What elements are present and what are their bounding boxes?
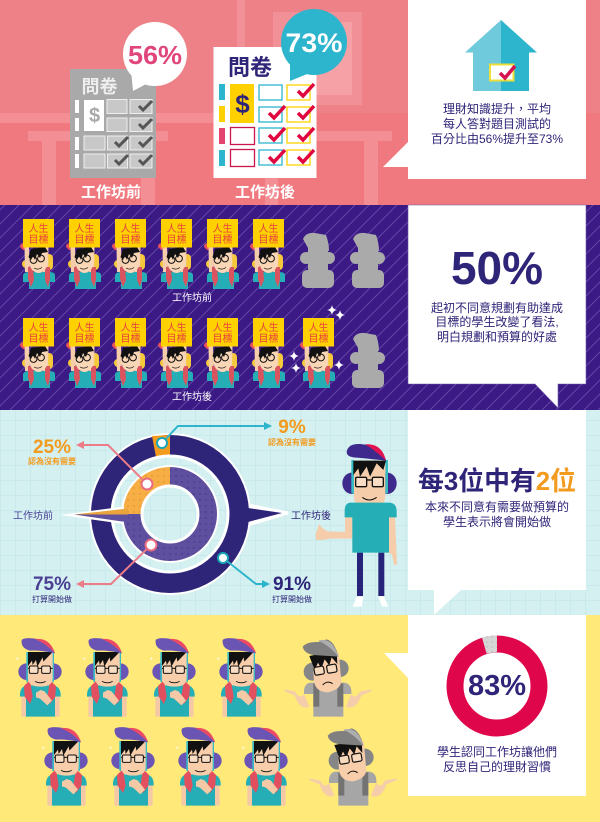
label: before workshop: 工作坊前	[172, 291, 212, 304]
row: after workshop people: 人生	[258, 321, 278, 334]
donut chart: 83%: 83%	[468, 670, 526, 702]
row: before workshop people: 目標	[258, 233, 278, 246]
label: 9% need none: 認為沒有需要	[268, 437, 316, 447]
panel: reflection on habits	[0, 615, 600, 822]
label: 91% will start: 91%	[273, 574, 311, 595]
label: after workshop: 工作坊後	[172, 390, 212, 403]
row: before workshop people: 目標	[212, 233, 232, 246]
label: 91% will start: 打算開始做	[272, 594, 312, 604]
callout: 2 of 3	[408, 410, 586, 615]
row: before workshop people: 目標	[166, 233, 186, 246]
row: before workshop people: 目標	[120, 233, 140, 246]
students: row 1	[16, 638, 263, 717]
row: after workshop people: 人生	[28, 321, 48, 334]
label: before workshop: 工作坊前	[81, 183, 141, 201]
callout lines	[82, 426, 266, 584]
inner ring before workshop	[60, 465, 219, 563]
label: 75% will start: 打算開始做	[32, 594, 72, 604]
row: before workshop people: 人生	[212, 222, 232, 235]
row: before workshop people: 人生	[120, 222, 140, 235]
label: 9% need none: 9%	[278, 417, 306, 438]
label: 75% will start	[32, 574, 72, 604]
callout: knowledge improved: 理財知識提升，平均	[443, 101, 551, 116]
label: after workshop: 工作坊後	[291, 509, 331, 522]
students: unsure	[284, 639, 397, 806]
row: after workshop people: 人生	[166, 321, 186, 334]
row: after workshop people: 目標	[74, 332, 94, 345]
row: before workshop people: 人生	[28, 222, 48, 235]
callout: 2 of 3: 每3位中有2位	[418, 466, 576, 496]
donut chart: 83%	[455, 636, 539, 728]
document: after workshop: 問卷	[228, 55, 272, 80]
label: 25% need none	[28, 437, 76, 466]
document: before workshop: 問卷	[82, 77, 118, 97]
row: after workshop people: 目標	[166, 332, 186, 345]
row: before workshop people: 人生	[258, 222, 278, 235]
row: after workshop people: 人生	[120, 321, 140, 334]
label: 9% need none	[268, 417, 316, 447]
callout: 50%: 起初不同意規劃有助達成	[431, 300, 563, 315]
callout: 83%: 學生認同工作坊讓他們	[437, 744, 557, 759]
label: 75% will start: 75%	[33, 574, 71, 595]
label: 91% will start	[272, 574, 312, 604]
row: after workshop people: 目標	[120, 332, 140, 345]
document: before workshop	[70, 69, 156, 178]
callout: 50%: 明白規劃和預算的好處	[437, 329, 557, 344]
speech bubble: 56%	[123, 22, 187, 91]
row: after workshop people: 目標	[212, 332, 232, 345]
speech bubble: 56%: 56%	[128, 40, 182, 70]
panel: willingness to budget	[0, 410, 600, 615]
row: after workshop people: 人生	[212, 321, 232, 334]
icon: house with check	[465, 20, 537, 91]
row: before workshop people: 目標	[74, 233, 94, 246]
row: after workshop people	[20, 305, 385, 388]
outer ring after workshop	[89, 433, 288, 595]
row: after workshop people: 人生	[74, 321, 94, 334]
row: after workshop people: 目標	[258, 332, 278, 345]
speech bubble: 73%: 73%	[286, 28, 342, 58]
label: after workshop: 工作坊後	[235, 183, 295, 201]
character: thumbs-up student	[316, 444, 397, 607]
row: before workshop people	[20, 219, 385, 289]
callout: 83%: 反思自己的理財習慣	[443, 759, 551, 774]
speech bubble: 73%	[281, 9, 347, 81]
callout: 50%	[408, 205, 586, 408]
callout: 50%: 目標的學生改變了看法,	[435, 314, 559, 329]
document: before workshop: $	[89, 105, 100, 127]
label: 25% need none: 認為沒有需要	[28, 456, 76, 466]
callout: knowledge improved	[383, 0, 586, 179]
document: after workshop	[214, 47, 316, 178]
panel: workshop test scores	[0, 0, 600, 205]
document: after workshop: $	[235, 89, 250, 119]
callout: 83%	[384, 615, 586, 796]
row: before workshop people: 人生	[74, 222, 94, 235]
label: 25% need none: 25%	[33, 437, 71, 458]
callout: 50%: 50%	[451, 242, 543, 294]
students: row 2	[42, 727, 288, 806]
donut chart	[60, 422, 288, 595]
row: after workshop people: 目標	[28, 332, 48, 345]
label: before workshop: 工作坊前	[13, 509, 53, 522]
callout: 2 of 3: 學生表示將會開始做	[443, 514, 551, 529]
row: before workshop people: 目標	[28, 233, 48, 246]
callout: knowledge improved: 每人答對題目測試的	[443, 116, 551, 131]
callout: 2 of 3: 本來不同意有需要做預算的	[425, 499, 569, 514]
callout: knowledge improved: 百分比由56%提升至73%	[431, 131, 563, 146]
panel: change of mind on planning	[0, 205, 600, 410]
row: after workshop people: 目標	[308, 332, 328, 345]
row: before workshop people: 人生	[166, 222, 186, 235]
row: after workshop people: 人生	[308, 321, 328, 334]
